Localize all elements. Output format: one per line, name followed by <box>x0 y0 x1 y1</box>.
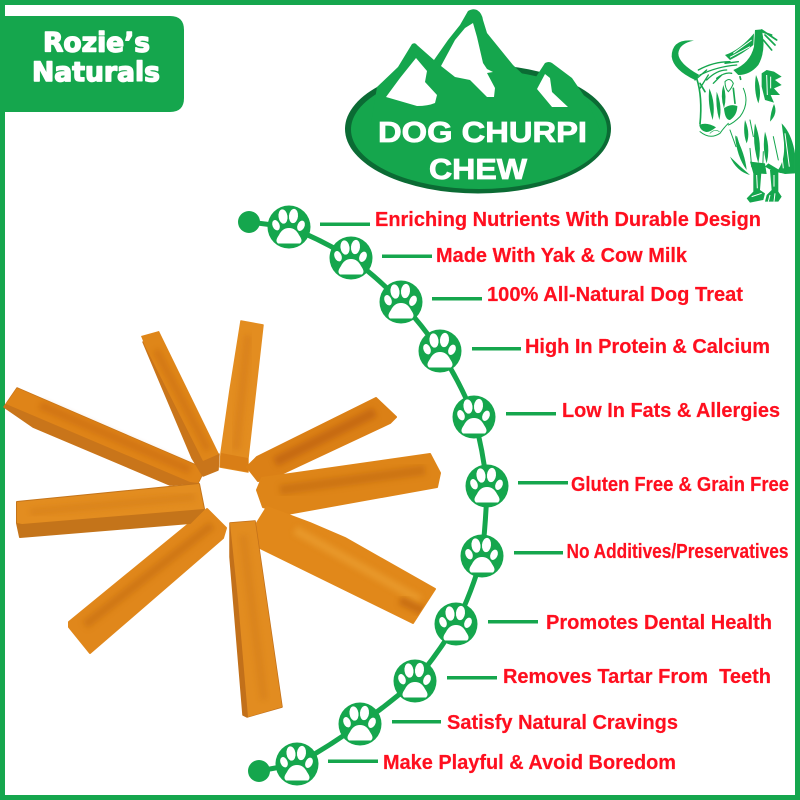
benefit 9 <box>394 660 771 702</box>
chew: left <box>17 484 204 537</box>
chew: top left short <box>141 331 219 476</box>
brand tab: Rozie's Naturals: Rozie’s <box>43 28 150 58</box>
brand tab: Rozie's Naturals: Naturals <box>32 57 160 88</box>
benefit 1: Enriching Nutrients With Durable Design <box>375 208 761 231</box>
benefit 2: Made With Yak & Cow Milk <box>436 244 688 267</box>
benefit 9: Removes Tartar From Teeth <box>503 665 771 688</box>
logo: mountains and title badge: CHEW <box>429 154 528 186</box>
benefit 10: Satisfy Natural Cravings <box>447 711 678 734</box>
timeline start dot <box>238 211 260 233</box>
benefit 5: Low In Fats & Allergies <box>562 399 780 422</box>
benefit 8: Promotes Dental Health <box>546 611 772 634</box>
benefit 3: 100% All-Natural Dog Treat <box>487 283 743 306</box>
benefit 11 <box>276 742 676 786</box>
benefit 2 <box>330 236 688 280</box>
benefit 8 <box>434 602 772 646</box>
benefit 4 <box>418 330 770 372</box>
chew: bottom <box>230 521 282 717</box>
benefit 10 <box>338 702 678 746</box>
benefit 6 <box>466 464 789 508</box>
icon: yak illustration <box>672 29 795 203</box>
timeline connector <box>249 222 487 771</box>
benefit 7 <box>460 534 788 578</box>
timeline end dot <box>248 760 270 782</box>
benefit 11: Make Playful & Avoid Boredom <box>383 751 676 774</box>
chew: right <box>257 454 440 514</box>
benefit 3 <box>380 280 743 324</box>
chews: product photo arranged in a star <box>4 321 440 717</box>
benefit 5 <box>452 396 780 438</box>
chew: lower right <box>257 507 435 623</box>
chew: lower left <box>69 509 226 653</box>
chew: upper right <box>247 398 396 481</box>
logo: mountains and title badge: DOG CHURPI <box>378 117 587 149</box>
benefit 1 <box>268 206 761 248</box>
logo: mountains and title badge <box>345 9 611 194</box>
benefit 4: High In Protein & Calcium <box>525 335 770 358</box>
chew: upper left long <box>4 388 205 485</box>
chew: top <box>220 321 263 472</box>
brand tab: Rozie's Naturals <box>0 16 184 112</box>
